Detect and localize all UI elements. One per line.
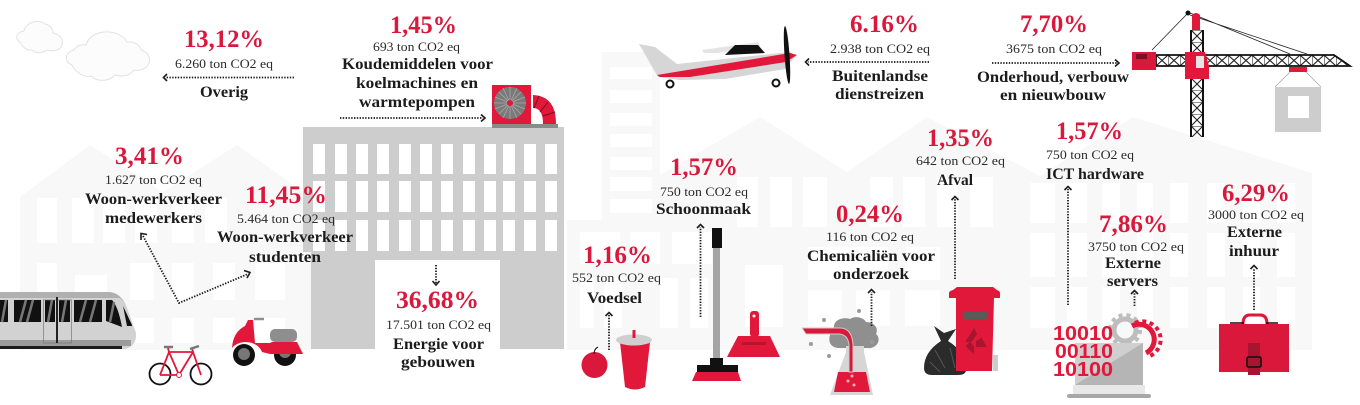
background: pale left houses (20, 145, 312, 350)
icon: train (0, 292, 136, 349)
icon: chemistry flask (802, 309, 879, 395)
text block: externe servers: Externe (1105, 255, 1161, 272)
background: pale tower (602, 52, 660, 222)
text block: woon-werkverkeer medewerkers: 3,41% (115, 143, 184, 170)
icon: tower crane (1132, 10, 1350, 137)
text block: schoonmaak: 1,57% (670, 154, 738, 181)
text block: onderhoud: Onderhoud, verbouw (977, 69, 1129, 86)
text block: woon-werkverkeer studenten: studenten (249, 249, 321, 266)
arrow: woon-werkverkeer split (141, 234, 250, 303)
text block: externe servers: 3750 ton CO2 eq (1088, 239, 1185, 254)
text block: schoonmaak: 750 ton CO2 eq (660, 184, 749, 199)
text block: koudemiddelen (342, 12, 493, 111)
icon: bicycle (150, 346, 212, 384)
text block: onderhoud (977, 11, 1129, 104)
text block: voedsel: 552 ton CO2 eq (572, 270, 662, 285)
text block: externe inhuur: 6,29% (1222, 180, 1290, 207)
text block: onderhoud: 3675 ton CO2 eq (1006, 41, 1103, 56)
text block: overig (175, 26, 274, 101)
icon: laptop with binary code and gears: 00110 (1055, 341, 1113, 363)
icon: briefcase (1219, 315, 1289, 375)
text block: ict hardware: ICT hardware (1046, 166, 1144, 183)
text block: koudemiddelen: Koudemiddelen voor (342, 56, 493, 73)
text block: energie voor gebouwen: 36,68% (396, 287, 479, 314)
text block: woon-werkverkeer medewerkers: 1.627 ton CO2 eq (105, 172, 203, 187)
icon: dustpan (727, 311, 780, 357)
text block: buitenlandse dienstreizen: dienstreizen (835, 86, 924, 103)
text block: woon-werkverkeer studenten (217, 182, 353, 266)
icon: clouds (17, 21, 150, 80)
arrow: energie (432, 265, 440, 285)
icon: laptop with binary code and gears (1053, 315, 1161, 398)
text block: overig: 13,12% (184, 26, 264, 53)
text block: overig: 6.260 ton CO2 eq (175, 56, 274, 71)
text block: afval (916, 125, 1006, 189)
text block: koudemiddelen: 1,45% (390, 12, 457, 39)
icon: broom (692, 228, 741, 381)
text block: energie voor gebouwen: 17.501 ton CO2 eq (386, 317, 492, 332)
arrow: externe servers (1131, 290, 1138, 306)
text block: externe servers: 7,86% (1099, 211, 1168, 238)
text block: afval: Afval (937, 172, 974, 189)
text block: afval: 1,35% (927, 125, 994, 152)
text block: woon-werkverkeer studenten: 5.464 ton CO2 eq (237, 211, 336, 226)
text block: ict hardware: 1,57% (1056, 118, 1123, 145)
text block: externe servers: servers (1107, 273, 1158, 290)
text block: buitenlandse dienstreizen: Buitenlandse (832, 68, 928, 85)
text block: koudemiddelen: warmtepompen (359, 94, 475, 111)
text block: buitenlandse dienstreizen: 6.16% (850, 11, 919, 38)
text block: woon-werkverkeer studenten: 11,45% (245, 182, 327, 209)
arrow: externe inhuur (1250, 266, 1258, 310)
icon: laptop with binary code and gears: 10010 (1053, 323, 1113, 345)
text block: voedsel: 1,16% (583, 242, 652, 269)
arrow: onderhoud (992, 60, 1119, 66)
text block: externe servers (1088, 211, 1185, 290)
text block: voedsel: Voedsel (587, 290, 643, 307)
text block: buitenlandse dienstreizen (830, 11, 931, 103)
text block: overig: Overig (200, 84, 248, 101)
text block: woon-werkverkeer medewerkers: Woon-werkverkeer (85, 191, 222, 208)
text block: chemicalien: Chemicaliën voor (807, 248, 935, 265)
text block: schoonmaak (656, 154, 751, 218)
text block: energie voor gebouwen: Energie voor (393, 336, 484, 353)
background: pale right houses (567, 117, 1312, 350)
icon: scooter (232, 319, 303, 366)
main building (303, 127, 564, 355)
arrow: schoonmaak (697, 224, 704, 317)
arrow: chemicalien (868, 290, 875, 326)
text block: chemicalien: onderzoek (833, 266, 909, 283)
text block: externe inhuur: inhuur (1229, 243, 1279, 260)
text block: externe inhuur (1208, 180, 1305, 260)
text block: woon-werkverkeer studenten: Woon-werkverkeer (217, 229, 353, 246)
icon: garbage bag (924, 326, 966, 375)
text block: chemicalien: 0,24% (836, 201, 904, 228)
text block: energie voor gebouwen (386, 287, 492, 371)
text block: woon-werkverkeer medewerkers (85, 143, 222, 227)
arrow: voedsel (606, 312, 612, 350)
arrow: koudemiddelen (340, 114, 485, 122)
icon: refrigeration unit (492, 85, 558, 128)
arrow: ict hardware (1064, 186, 1072, 305)
icon: drink cup (616, 330, 652, 390)
text block: energie voor gebouwen: gebouwen (401, 354, 475, 371)
arrow: buitenlandse dienstreizen (806, 58, 929, 66)
icon: airplane (639, 26, 797, 88)
text block: schoonmaak: Schoonmaak (656, 201, 751, 218)
text block: externe inhuur: Externe (1227, 224, 1282, 241)
text block: chemicalien: 116 ton CO2 eq (826, 229, 915, 244)
arrow: overig (164, 74, 294, 81)
text block: voedsel (572, 242, 662, 307)
text block: koudemiddelen: koelmachines en (356, 75, 478, 92)
icon: laptop with binary code and gears: 10100 (1053, 359, 1113, 381)
text block: woon-werkverkeer medewerkers: medewerkers (105, 210, 202, 227)
text block: onderhoud: en nieuwbouw (1000, 87, 1106, 104)
text block: afval: 642 ton CO2 eq (916, 153, 1006, 168)
text block: buitenlandse dienstreizen: 2.938 ton CO2 eq (830, 41, 931, 56)
text block: koudemiddelen: 693 ton CO2 eq (373, 39, 461, 54)
text block: onderhoud: 7,70% (1020, 11, 1088, 38)
text block: externe inhuur: 3000 ton CO2 eq (1208, 207, 1305, 222)
icon: apple (582, 347, 608, 378)
text block: ict hardware (1046, 118, 1144, 183)
icon: recycling bin (949, 287, 1000, 371)
text block: chemicalien (807, 201, 935, 283)
arrow: afval (952, 196, 958, 279)
text block: ict hardware: 750 ton CO2 eq (1046, 147, 1135, 162)
